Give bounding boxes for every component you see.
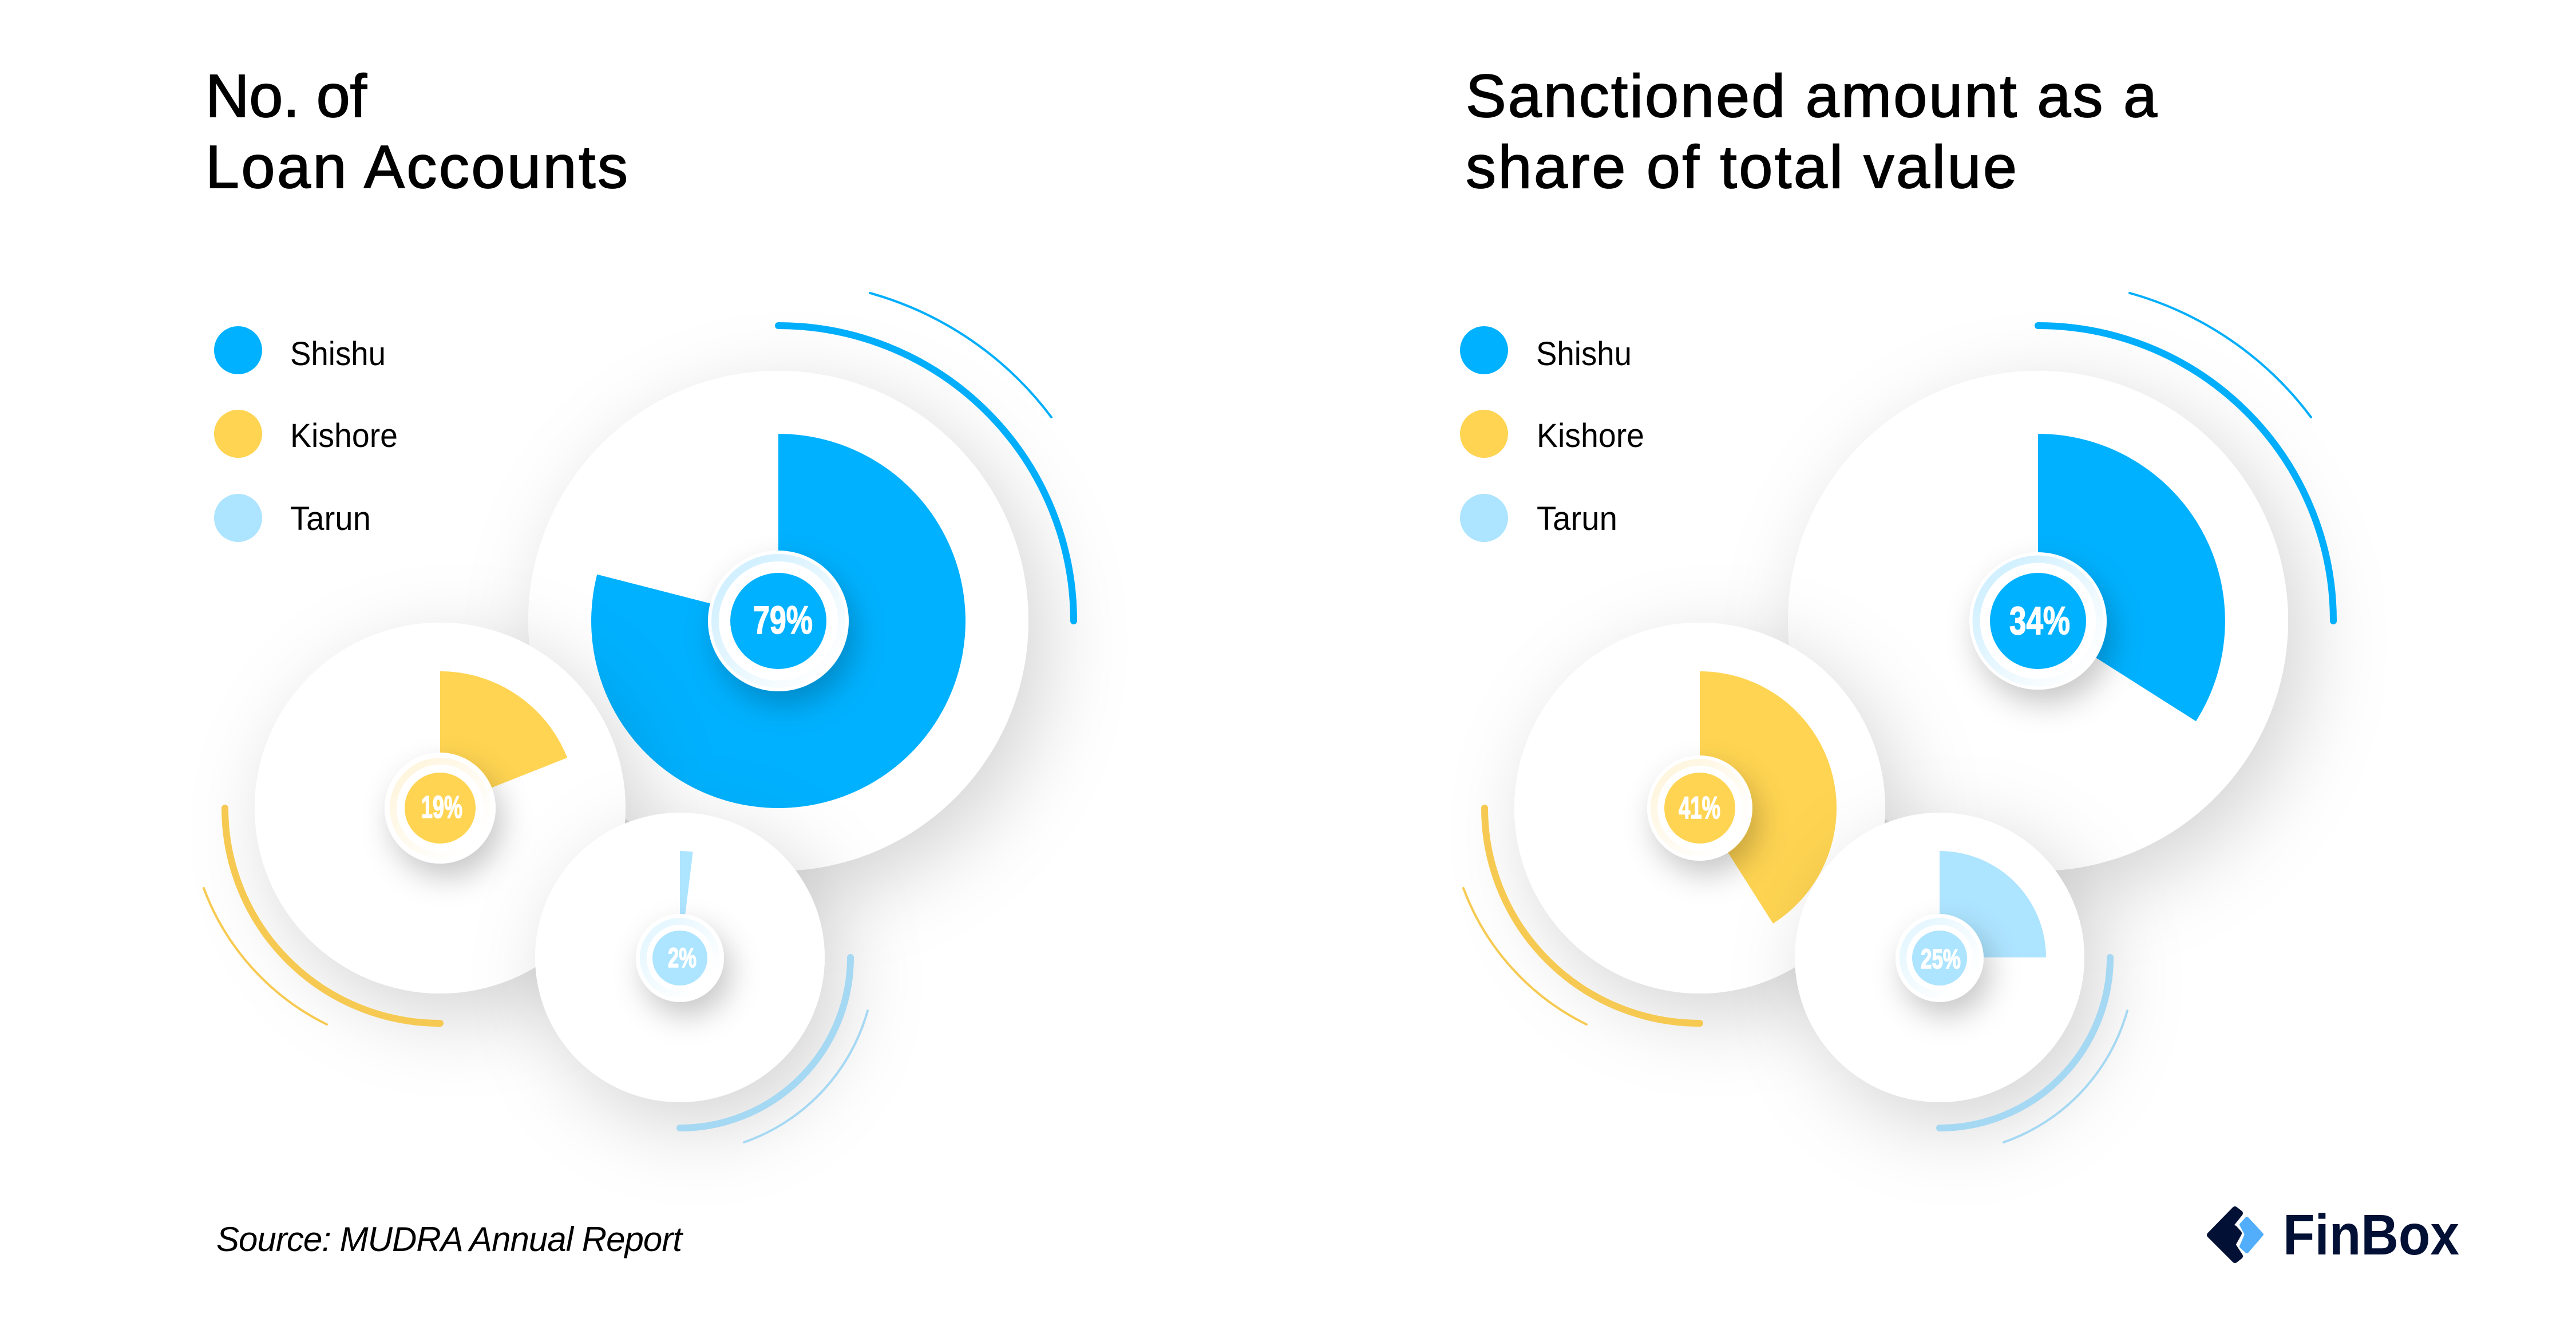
title: Sanctioned amount as a share of total value: share of total value [1466,133,2017,201]
chart: Shishu 34%: 34% [2009,599,2070,643]
chart: Kishore 19%: 19% [421,789,462,825]
chart: Kishore 19% [204,623,626,1024]
legend: Kishore [290,417,398,454]
legend: Tarun [1537,500,1617,537]
source note: Source: MUDRA Annual Report [216,1220,683,1258]
legend [214,326,398,542]
chart: Shishu 34% [1788,293,2333,871]
chart: Shishu 79% [528,293,1074,871]
legend: Shishu [290,335,386,373]
chart: Tarun 2%: 2% [668,943,697,973]
chart: Tarun 25%: 25% [1921,944,1961,975]
legend: Kishore [1537,417,1644,454]
logo: FinBox [2210,1203,2459,1267]
legend [1460,326,1644,542]
panel: number of loan accounts [204,62,1074,1258]
title: Sanctioned amount as a share of total value: Sanctioned amount as a [1466,62,2157,130]
panel: sanctioned amount [1460,62,2333,1142]
title: Sanctioned amount as a share of total value [1466,62,2157,201]
title: No. of Loan Accounts: Loan Accounts [205,133,628,201]
chart: Tarun 2% [535,813,868,1142]
chart: Kishore 41% [1463,623,1885,1024]
title: No. of Loan Accounts: No. of [205,62,367,130]
icon: FinBox mark [2210,1209,2262,1260]
legend: Tarun [290,500,371,537]
title: No. of Loan Accounts [205,62,628,201]
chart: Tarun 25% [1795,813,2127,1142]
chart: Kishore 41%: 41% [1679,790,1720,825]
chart: Shishu 79%: 79% [753,598,813,642]
legend: Shishu [1536,335,1632,373]
logo: FinBox: FinBox [2283,1203,2459,1267]
